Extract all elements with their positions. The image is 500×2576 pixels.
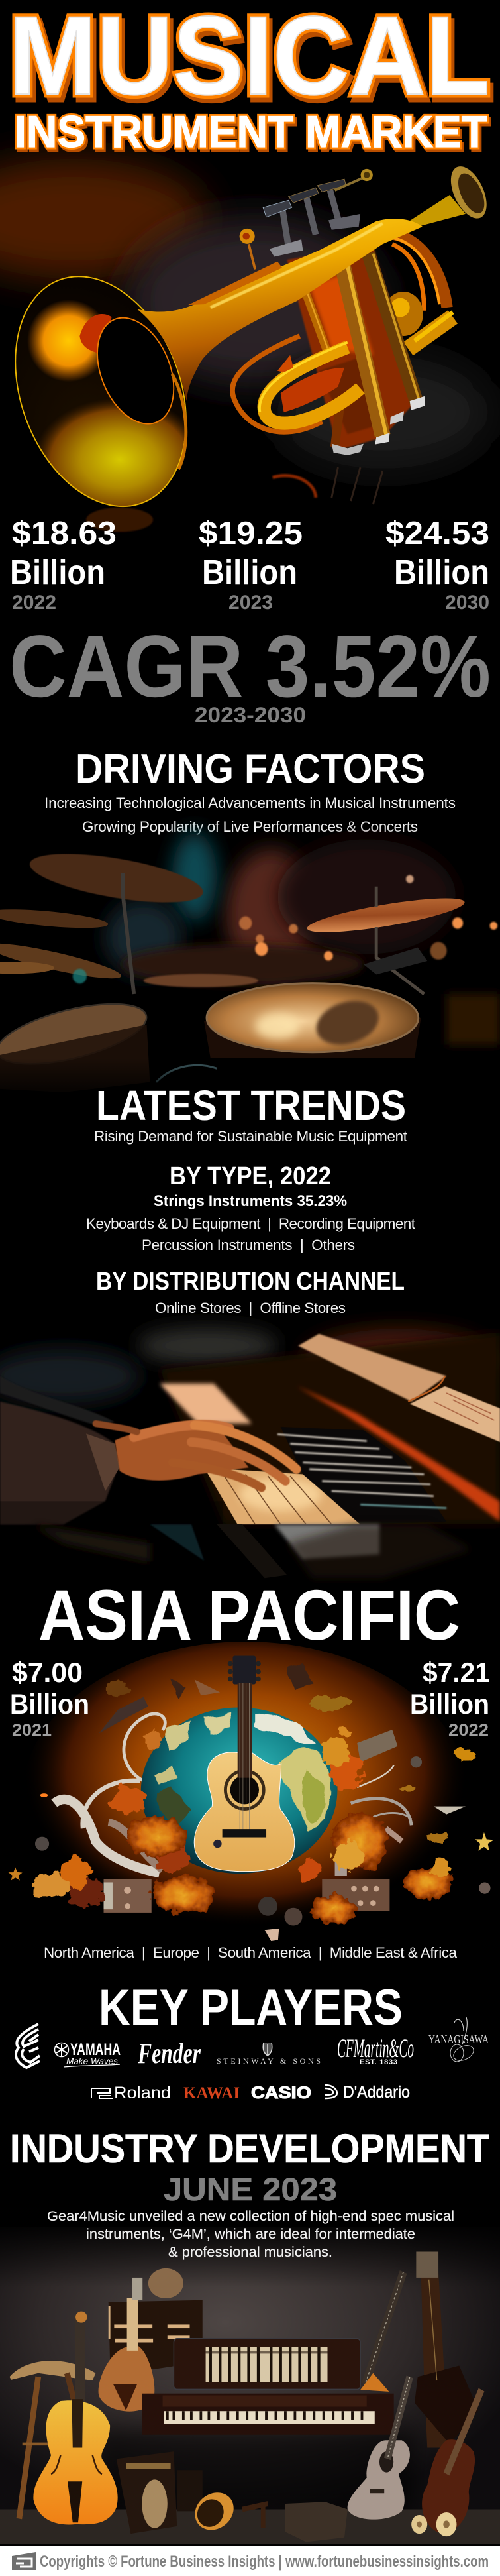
logo: Steinway and Sons <box>217 2043 321 2066</box>
main tube <box>137 219 423 401</box>
stool <box>9 2361 95 2519</box>
key player logos: CFMartin&Co <box>337 2033 414 2063</box>
blurred foreground <box>32 1524 472 1578</box>
heading: latest trends: LATEST TRENDS <box>96 1082 406 1129</box>
stat: 2022 market size <box>10 516 117 614</box>
logo: D'Addario: D'Addario <box>343 2083 410 2101</box>
heading: by distribution channel: BY DISTRIBUTION CHANNEL <box>96 1268 405 1296</box>
development date: JUNE 2023 <box>164 2172 337 2208</box>
stat: 2022 market size: 2022 <box>12 592 56 614</box>
bell interior <box>15 276 188 508</box>
hand <box>95 1424 297 1488</box>
fire clouds <box>32 1679 474 1924</box>
image: golden trumpet <box>0 158 494 530</box>
latest trends text: Rising Demand for Sustainable Music Equipment <box>94 1128 408 1145</box>
grey guitar <box>348 2377 410 2520</box>
stat: asia pacific 2022: Billion <box>410 1689 489 1720</box>
stat: 2030 market size: 2030 <box>445 592 489 614</box>
development description <box>47 2209 454 2260</box>
sleeve <box>0 1402 118 1524</box>
footer: copyright band <box>0 2546 500 2576</box>
logo: Martin and Co: EST. 1833 <box>360 2058 397 2066</box>
development description: instruments, ‘G4M’, which are ideal for intermediate <box>86 2227 415 2242</box>
stat: asia pacific 2021: 2021 <box>12 1721 52 1740</box>
stat: 2023 market size <box>199 516 303 614</box>
image: globe with guitar <box>9 1642 493 1952</box>
snare and floor tom heads <box>0 983 500 1102</box>
logo: Kawai: KAWAI <box>183 2084 240 2102</box>
upright keyboard <box>142 2394 394 2435</box>
stat: asia pacific 2022 <box>410 1657 490 1740</box>
stat: 2023 market size: 2023 <box>228 592 273 614</box>
logo: Yamaha: YAMAHA <box>70 2041 121 2059</box>
keyboard <box>204 1427 446 1524</box>
piano backdrop <box>0 1329 500 1524</box>
icon: Fortune Business Insights logo <box>12 2552 36 2570</box>
stat: asia pacific 2021 <box>10 1657 89 1740</box>
stat: asia pacific 2021: Billion <box>10 1689 89 1720</box>
type breakdown <box>86 1192 416 1253</box>
stat: 2030 market size <box>385 516 489 614</box>
key player logos <box>16 2017 489 2102</box>
sheet music <box>298 1334 500 1442</box>
title: Instrument Market: INSTRUMENT MARKET <box>15 107 487 157</box>
driving factor list: Increasing Technological Advancements in Musical Instruments <box>44 795 456 811</box>
logo: Yanagisawa <box>428 2017 489 2064</box>
image: trumpet reflection <box>86 467 383 532</box>
small guitar <box>99 2278 154 2412</box>
backdrop glow <box>0 158 491 469</box>
stat: 2030 market size: Billion <box>394 553 489 592</box>
distribution channels: Online Stores | Offline Stores <box>155 1300 346 1316</box>
valve caps and finger hooks <box>240 169 373 270</box>
orange burst <box>23 1642 469 1952</box>
image: drum kit <box>0 832 500 1102</box>
type breakdown: Keyboards & DJ Equipment | Recording Equipment <box>86 1215 416 1232</box>
logo: Fender: Fender <box>137 2037 201 2070</box>
studio backdrop <box>0 2220 500 2544</box>
stat: 2023 market size: $19.25 <box>199 516 303 551</box>
flying debris <box>9 1663 493 1941</box>
other regions: North America | Europe | South America | Middle East & Africa <box>44 1944 457 1961</box>
stat: 2022 market size: Billion <box>10 553 105 592</box>
logo: Martin and Co <box>337 2033 414 2066</box>
stat: 2022 market size: $18.63 <box>12 516 117 551</box>
heading: asia pacific: ASIA PACIFIC <box>38 1575 460 1655</box>
blurred keys <box>160 1384 252 1424</box>
stat: 2030 market size: $24.53 <box>385 516 489 551</box>
cymbals and bokeh <box>0 844 497 994</box>
development description: & professional musicians. <box>168 2245 332 2260</box>
image: collection of instruments <box>0 2220 500 2544</box>
logo: Roland: Roland <box>114 2084 171 2102</box>
organ cabinet <box>174 2339 360 2390</box>
curios on the floor <box>117 2451 348 2542</box>
logo: Yamaha <box>54 2041 121 2067</box>
title: Instrument Market: INSTRUMENT MARKET <box>15 107 487 157</box>
tuning slide loop <box>232 336 360 432</box>
logo: Roland <box>91 2084 171 2102</box>
rear loop and flare <box>367 161 494 349</box>
brown violin <box>411 2390 481 2536</box>
valve block <box>287 244 425 455</box>
orange piano edge <box>297 1386 500 1522</box>
stat: asia pacific 2022: $7.21 <box>423 1657 490 1688</box>
stat: 2023 market size: Billion <box>202 553 297 592</box>
globe <box>141 1707 337 1874</box>
image: pianist hands on keys <box>0 1329 500 1578</box>
driving factor list: Growing Popularity of Live Performances & Concerts <box>82 818 418 835</box>
logo: Casio: CASIO <box>251 2084 311 2102</box>
type breakdown: Strings Instruments 35.23% <box>154 1192 347 1210</box>
amplifiers <box>103 1856 389 1913</box>
stat: asia pacific 2022: 2022 <box>448 1721 489 1740</box>
development description: Gear4Music unveiled a new collection of high-end spec musical <box>47 2209 454 2224</box>
stat: asia pacific 2021: $7.00 <box>12 1657 83 1688</box>
heading: key players: KEY PLAYERS <box>99 1980 403 2036</box>
box and gramophone <box>109 2268 203 2369</box>
type breakdown: Percussion Instruments | Others <box>142 1237 355 1253</box>
guitar <box>194 1655 295 1872</box>
heading: by type: BY TYPE, 2022 <box>170 1162 331 1190</box>
logo: Steinway and Sons: STEINWAY & SONS <box>217 2056 321 2066</box>
logo: Ernie Ball mark <box>16 2024 40 2068</box>
tall instruments behind <box>360 2251 478 2447</box>
CAGR figure: 2023-2030 <box>195 703 306 727</box>
stage lighting <box>105 832 456 985</box>
heading: driving factors: DRIVING FACTORS <box>75 746 425 792</box>
driving factor list <box>44 795 456 835</box>
cello <box>33 2312 118 2524</box>
ribbons <box>54 1714 411 1873</box>
logo: Yamaha: Make Waves <box>66 2056 118 2066</box>
